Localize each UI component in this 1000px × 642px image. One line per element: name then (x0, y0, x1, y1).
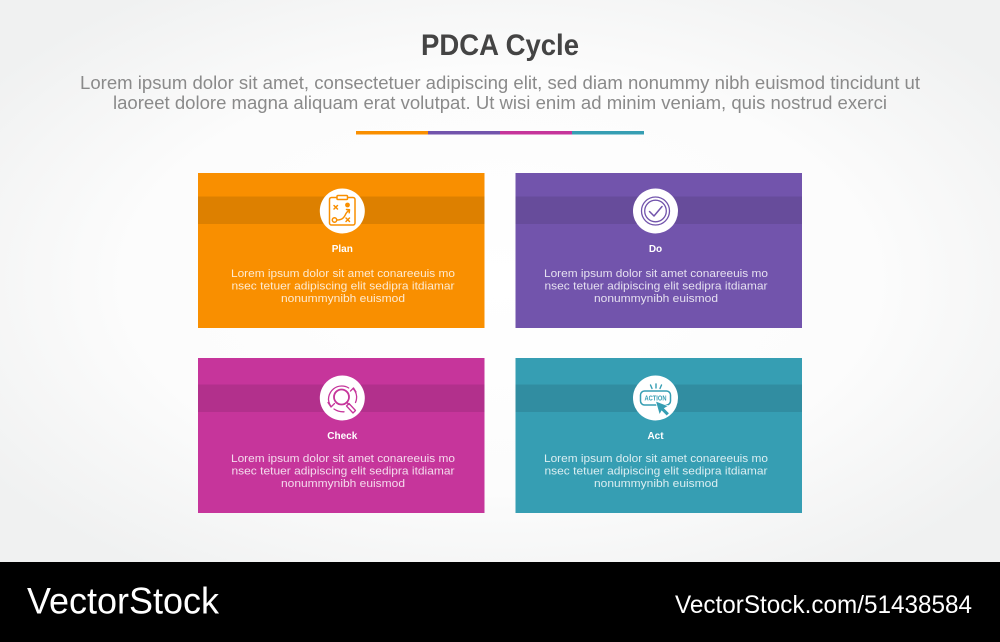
text block: Act: nsec tetuer adipiscing elit sedipra itdiamar (544, 466, 768, 478)
subtitle: laoreet dolore magna aliquam erat volutpat. Ut wisi enim ad minim veniam, quis nostrud exerci (113, 93, 887, 113)
text block: Do (544, 268, 768, 305)
icon: clipboard plan (320, 188, 365, 234)
text block: Check (231, 453, 455, 490)
footer bar (0, 562, 1000, 642)
panel: Check (198, 358, 484, 513)
icon: magnifier with cycle arrows (320, 376, 365, 420)
text block: Act: nonummynibh euismod (594, 478, 718, 490)
text block: Plan: nonummynibh euismod (281, 293, 405, 305)
panel: Plan (198, 173, 484, 328)
icon: check mark circle (633, 188, 678, 234)
subtitle (80, 73, 920, 113)
text block: Do: nsec tetuer adipiscing elit sedipra itdiamar (544, 280, 768, 292)
text block: Check: nsec tetuer adipiscing elit sedipra itdiamar (232, 466, 455, 478)
text block: Plan (231, 268, 455, 305)
text block: Check: nonummynibh euismod (281, 478, 405, 490)
heading: Act: Act (647, 431, 664, 442)
text block: Do: Lorem ipsum dolor sit amet conareeuis mo (544, 268, 768, 280)
icon: action button with cursor (633, 376, 678, 420)
subtitle: Lorem ipsum dolor sit amet, consectetuer adipiscing elit, sed diam nonummy nibh euismod tincidunt ut (80, 73, 920, 93)
four-colour divider (356, 131, 644, 134)
panel: Act (516, 358, 802, 513)
footer image id text: VectorStock.com/51438584 (675, 591, 972, 619)
title: PDCA Cycle (421, 29, 579, 62)
panel: Do (516, 173, 802, 328)
text block: Check: Lorem ipsum dolor sit amet conareeuis mo (231, 453, 455, 465)
text block: Act (544, 453, 768, 490)
heading: Do: Do (649, 244, 662, 255)
text block: Act: Lorem ipsum dolor sit amet conareeuis mo (544, 453, 768, 465)
footer logo text: VectorStock (27, 580, 219, 622)
heading: Check: Check (327, 431, 358, 442)
text block: Do: nonummynibh euismod (594, 293, 718, 305)
text block: Plan: Lorem ipsum dolor sit amet conareeuis mo (231, 268, 455, 280)
icon: action button with cursor: ACTION (644, 396, 666, 402)
heading: Plan: Plan (332, 244, 353, 255)
text block: Plan: nsec tetuer adipiscing elit sedipra itdiamar (232, 280, 455, 292)
